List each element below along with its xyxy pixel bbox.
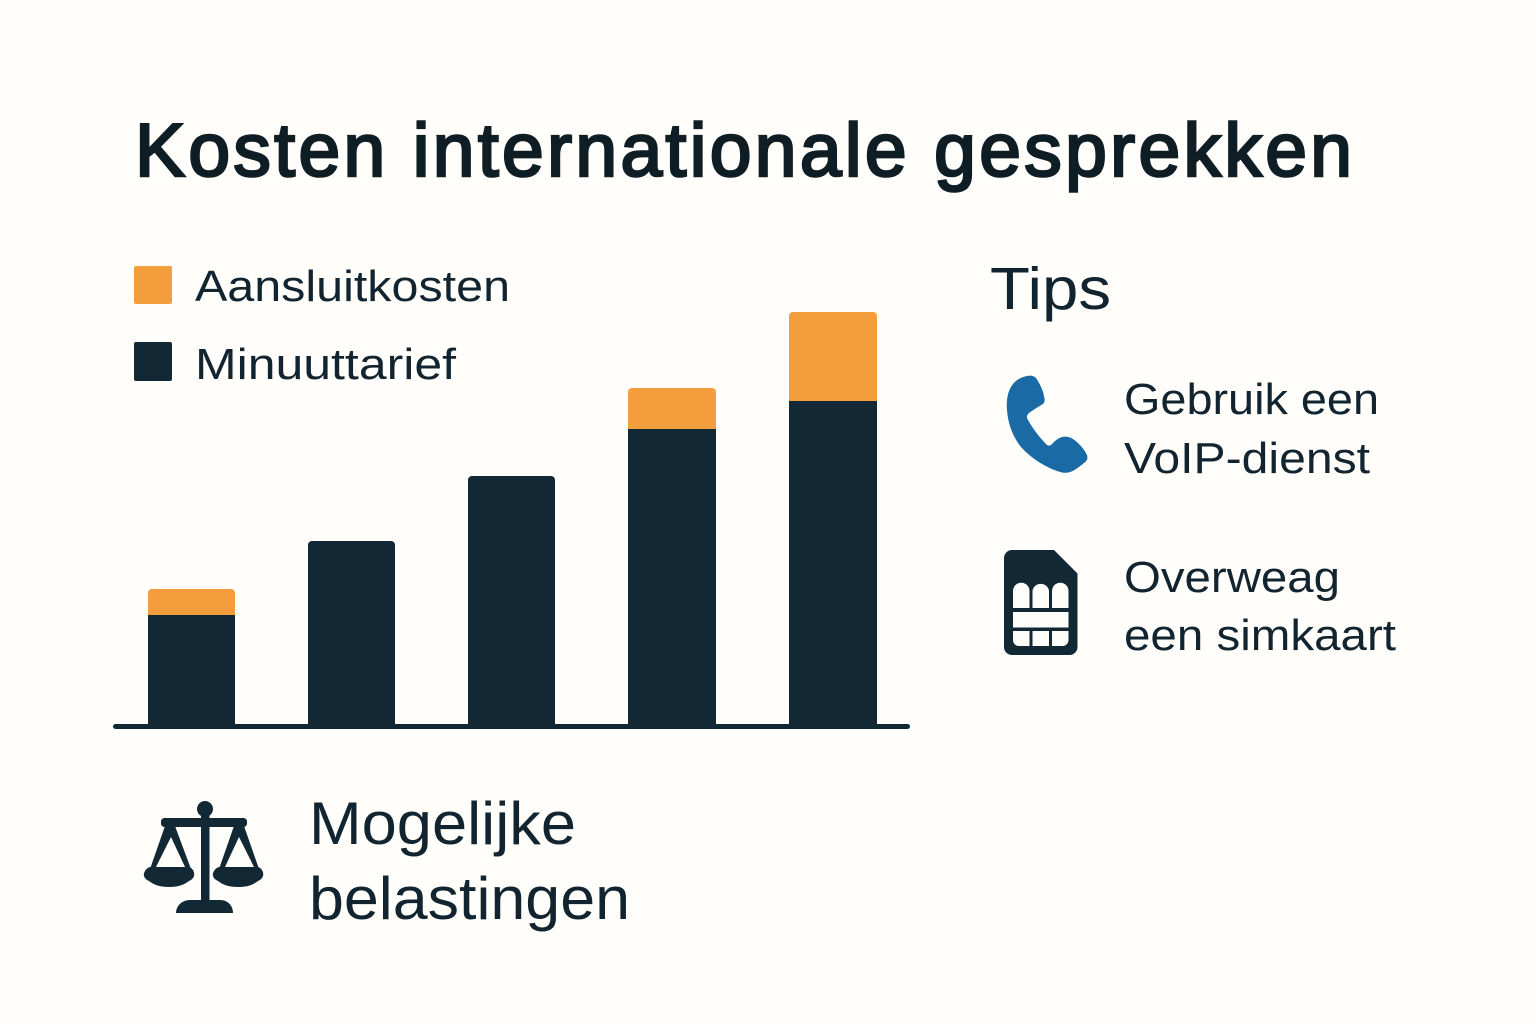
bar chart (113, 312, 910, 729)
bar 1 (148, 589, 235, 726)
bar 2 (308, 541, 395, 726)
icon: scales (144, 801, 263, 913)
text: Gebruik een VoIP-dienst (1124, 375, 1379, 483)
text: Overweeg een simkaart: Overweag (1124, 553, 1340, 602)
legend (134, 262, 510, 389)
bar 5 (789, 312, 877, 726)
text: Overweeg een simkaart (1124, 553, 1396, 660)
text: Mogelijke belastingen (309, 790, 630, 932)
icon: SIM card (1004, 550, 1078, 655)
title: Kosten internationale gesprekken (135, 108, 1352, 192)
text: Mogelijke belastingen: Mogelijke (309, 790, 576, 857)
text: Gebruik een VoIP-dienst: VoIP-dienst (1124, 434, 1370, 483)
legend item: Aansluitkosten: Aansluitkosten (195, 262, 510, 311)
text: Mogelijke belastingen: belastingen (309, 865, 630, 932)
bar 4 (628, 388, 716, 726)
heading: Tips: Tips (990, 256, 1111, 322)
legend item: Minuuttarief: Minuuttarief (195, 340, 457, 389)
text: Gebruik een VoIP-dienst: Gebruik een (1124, 375, 1379, 424)
axis baseline (113, 724, 910, 729)
bar 3 (468, 476, 555, 726)
text: Overweeg een simkaart: een simkaart (1124, 611, 1396, 660)
icon: phone (1007, 376, 1087, 473)
